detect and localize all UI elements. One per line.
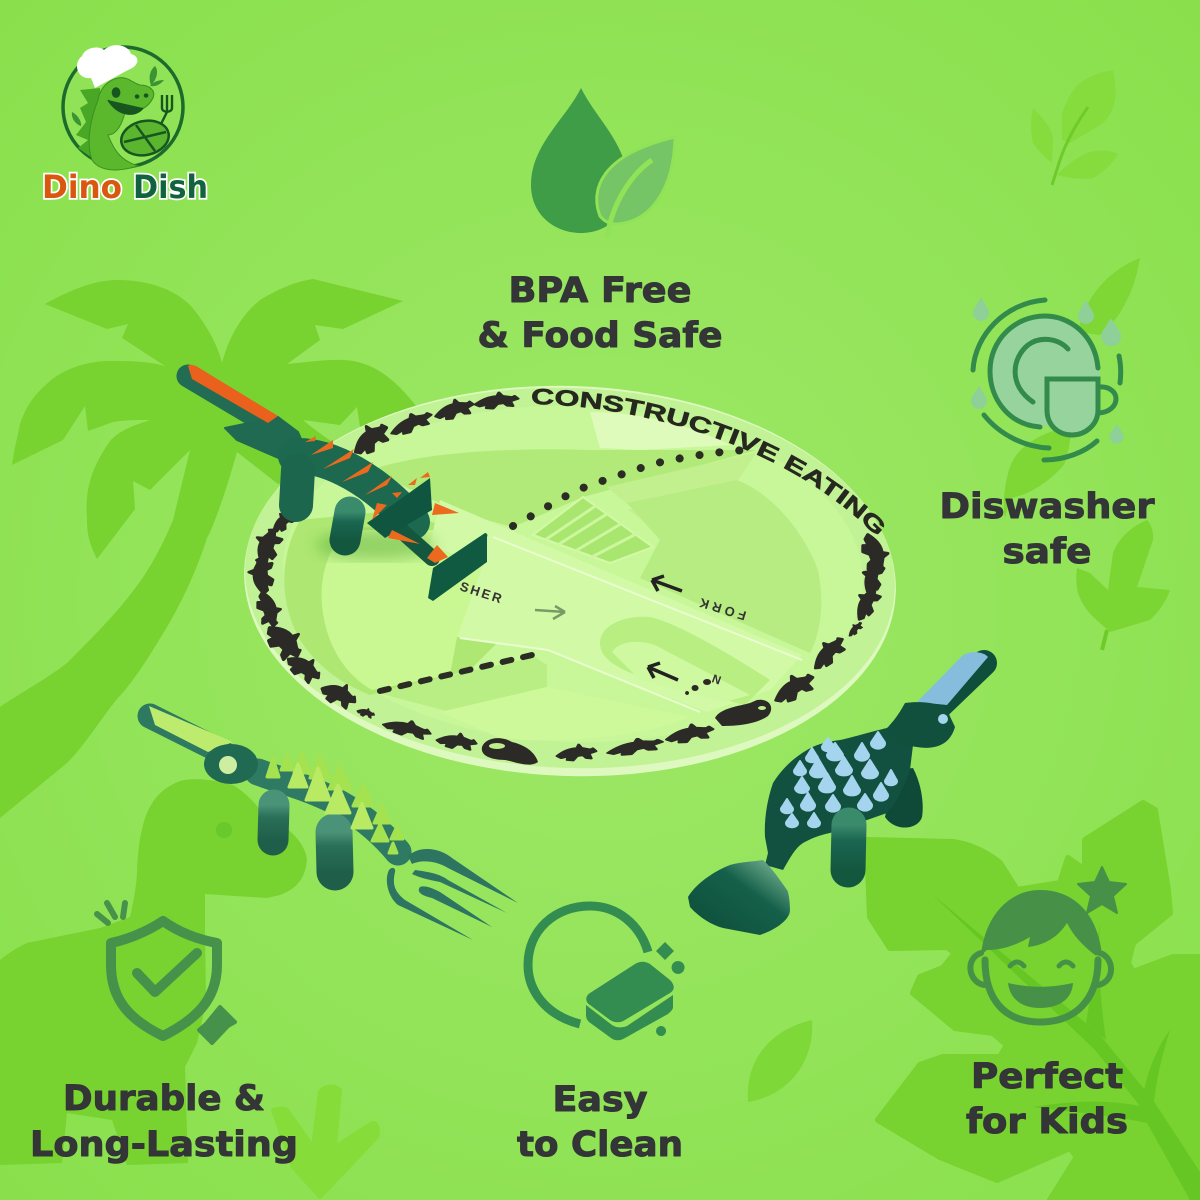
- plate: lower compartment floor: [440, 687, 690, 740]
- plate: lower compartment: [375, 657, 547, 712]
- pusher: blade: [428, 533, 487, 601]
- sponge: top: [586, 962, 674, 1022]
- plate: label fork: FORK: [697, 595, 748, 623]
- background: dinosaur eye: [216, 822, 232, 838]
- pusher: orange spikes: [372, 472, 459, 563]
- spoon dinosaur: [688, 652, 988, 935]
- plate: fork recess: [533, 497, 653, 563]
- dish: [990, 316, 1100, 426]
- fork: tines: [387, 849, 518, 940]
- heading: easy to clean: [517, 1080, 683, 1165]
- heading: easy to clean: Easy: [552, 1080, 648, 1120]
- plate: rim loop dinosaur right: [715, 700, 771, 726]
- fork: head: [204, 744, 258, 784]
- kid: eyes: [1010, 962, 1073, 966]
- logo: dinosaur: [89, 78, 154, 170]
- pusher: front leg: [345, 512, 350, 540]
- background: leaf behind dish top: [1078, 258, 1140, 335]
- heading: dishwasher safe: Diswasher: [940, 487, 1155, 527]
- fork: rear leg: [273, 805, 274, 840]
- logo: badge circle: [63, 47, 183, 167]
- icon: water drop with leaf: [531, 88, 675, 237]
- pusher: orange stripes: [305, 436, 402, 498]
- spoon: handle grip: [917, 652, 988, 705]
- kid: hair: [981, 890, 1102, 955]
- plate: edge highlight: [237, 375, 903, 787]
- icon: dish and cup: [971, 297, 1124, 460]
- heading: dishwasher safe: [940, 487, 1155, 572]
- background: top right leaves: [1031, 70, 1118, 185]
- spoon: body: [765, 720, 913, 870]
- pusher: orange grip: [188, 365, 278, 423]
- cup handle: [1098, 387, 1116, 413]
- shield outline: [111, 921, 217, 1036]
- heading: BPA free: [478, 271, 722, 356]
- plate: rim dinosaurs: [247, 392, 891, 761]
- logo: wordmark: [42, 168, 208, 206]
- background: monstera leaf: [867, 803, 1200, 1200]
- sponge: ring: [528, 906, 648, 1024]
- dish inner arc: [1015, 339, 1068, 402]
- plate: spoon recess floor: [612, 642, 750, 702]
- plate: fork compartment: [627, 480, 821, 653]
- sponge: sparkle: [656, 942, 674, 960]
- icon: shield: [97, 903, 235, 1043]
- kid: face outline: [985, 960, 1098, 1022]
- background: right lower leaves: [1076, 520, 1170, 650]
- plate: rim text: CONSTRUCTIVE EATING: [532, 388, 884, 534]
- kid: star: [1078, 867, 1126, 913]
- logo: dinosaur face: [108, 88, 148, 114]
- background: leaf behind dish bottom: [1004, 425, 1075, 518]
- logo: wordmark: Dino: [42, 168, 122, 206]
- heading: durable: Long-Lasting: [30, 1125, 298, 1165]
- pusher: neck: [225, 417, 310, 463]
- heading: durable: Durable &: [63, 1079, 265, 1119]
- sponge: bubbles: [656, 961, 685, 1036]
- background: dinosaur silhouette: [0, 779, 307, 1165]
- fork: body: [258, 772, 398, 852]
- plate: rim loop dinosaur left: [482, 738, 538, 765]
- spoon: front leg: [848, 825, 849, 870]
- plate: dinosaur shadow: [315, 530, 435, 560]
- fork: plates: [267, 753, 403, 853]
- outer arcs: [973, 300, 1121, 460]
- plate: top highlight: [590, 412, 730, 450]
- plate: arrow fork: [652, 576, 682, 591]
- fork: handle: [150, 716, 222, 752]
- heading: BPA free: BPA Free: [508, 271, 692, 311]
- logo: dinosaur spikes: [76, 88, 102, 160]
- pusher dinosaur: [188, 365, 487, 601]
- plate: arrow spoon: [648, 663, 678, 680]
- spoon: head: [887, 702, 955, 748]
- heading: BPA free: & Food Safe: [478, 316, 722, 356]
- fork dinosaur: [149, 706, 518, 940]
- plate: [244, 386, 896, 776]
- plate: top dashed line: [513, 450, 745, 526]
- sponge: bottom: [586, 995, 673, 1040]
- plate: bowl lip: [277, 396, 869, 752]
- logo: fork: [160, 95, 172, 126]
- water drops: [971, 297, 1124, 444]
- pusher: tail: [395, 525, 432, 558]
- plate: spoon recess: [600, 617, 770, 705]
- fork: front leg: [334, 832, 335, 872]
- background: small bottom leaf: [273, 1086, 378, 1197]
- plate: label spoon: N: [710, 671, 723, 687]
- fork: handle grip: [149, 706, 233, 752]
- logo: waffle plate: [118, 116, 172, 160]
- heading: easy to clean: to Clean: [517, 1125, 683, 1165]
- plate: divider edge: [460, 537, 802, 712]
- heading: perfect for kids: for Kids: [966, 1102, 1128, 1142]
- plate: spoon label dots: [685, 679, 711, 695]
- shield badge: [199, 1007, 235, 1043]
- heading: perfect for kids: Perfect: [971, 1057, 1123, 1097]
- logo: wordmark: Dish: [133, 168, 208, 206]
- spoon: blue spikes: [781, 715, 947, 827]
- spoon: spoon bowl: [688, 860, 790, 935]
- plate: pusher compartment floor: [322, 530, 620, 690]
- plate: bottom dashed line: [380, 655, 532, 691]
- plate: divider: [430, 500, 802, 712]
- pusher: rear leg: [296, 470, 298, 505]
- kid: mouth: [1008, 983, 1073, 1008]
- pusher: plate on back: [367, 478, 432, 538]
- shield sparks: [97, 903, 125, 923]
- icon: happy kid: [970, 867, 1126, 1022]
- pusher: handle: [188, 376, 272, 426]
- background: palm tree silhouette: [0, 279, 420, 818]
- background: monstera veins: [932, 894, 1200, 1200]
- plate: pusher compartment lip: [284, 510, 540, 695]
- logo: leaves: [72, 66, 164, 126]
- icon: sponge: [528, 906, 685, 1040]
- plate: label pusher: SHER: [458, 579, 504, 606]
- plate: outer rim: [239, 377, 901, 779]
- heading: perfect for kids: [966, 1057, 1128, 1142]
- plate: upper compartment: [370, 449, 757, 527]
- background: small leaf centre bottom: [748, 1020, 812, 1102]
- logo: chef hat: [77, 45, 137, 88]
- spoon: handle: [935, 663, 984, 710]
- heading: dishwasher safe: safe: [1002, 532, 1092, 572]
- shield check: [137, 953, 197, 992]
- plate: fork tines: [545, 505, 640, 558]
- kid: ears: [970, 953, 1111, 985]
- plate: arrow pusher: [535, 606, 565, 619]
- pusher: body: [296, 456, 412, 522]
- logo: [42, 45, 208, 206]
- cup: [1047, 379, 1098, 435]
- plate: fork compartment wall: [607, 452, 757, 540]
- heading: durable: [30, 1079, 298, 1165]
- dish arcs: [990, 316, 1098, 427]
- fork: eye: [219, 756, 237, 774]
- spoon: rear leg: [885, 768, 923, 828]
